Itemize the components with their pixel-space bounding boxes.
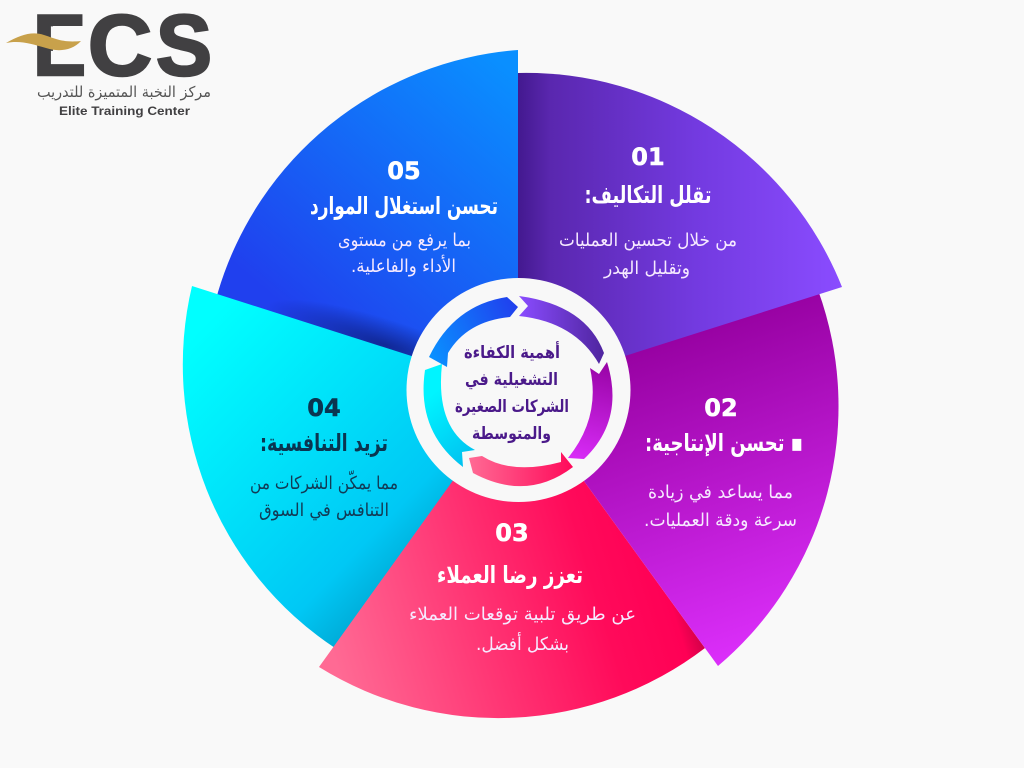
panel: 03 customer satisfaction [319,390,710,718]
logo letters ECS: S [156,0,212,94]
arrow 4 [424,364,475,467]
number 03: 03 [495,519,529,547]
center title: الشركات الصغيرة [455,397,569,417]
heading 02: ▪ تحسن الإنتاجية: [645,429,803,457]
text 04: مما يمكّن الشركات من [250,470,398,494]
text 03: بشكل أفضل. [476,632,569,655]
heading 04: تزيد التنافسية: [260,429,388,457]
text 05: بما يرفع من مستوى [338,230,471,251]
number 01: 01 [631,143,665,171]
text 03: عن طريق تلبية توقعات العملاء [409,604,636,625]
panel: 01 costs [518,73,842,390]
center title [455,341,569,444]
text 01: وتقليل الهدر [603,258,690,279]
number 02: 02 [704,394,738,422]
logo Arabic name: مركز النخبة المتميزة للتدريب [37,83,211,101]
text 05 [338,230,471,277]
center title: أهمية الكفاءة [464,341,560,363]
center circle [406,278,630,502]
center title: التشغيلية في [465,370,558,390]
number 04: 04 [307,394,341,422]
text 01: من خلال تحسين العمليات [559,230,737,251]
text 01 [559,230,737,279]
logo letters ECS: E [33,0,86,94]
panel: 05 resources [216,50,518,408]
logo gold swoosh [6,33,81,50]
panel: 02 productivity [518,290,839,666]
arrow 2 [568,362,612,459]
heading 01: تقلل التكاليف: [584,181,712,209]
center title: والمتوسطة [472,424,551,444]
arrow 5 [429,297,518,367]
panel: 04 competitiveness [183,286,518,648]
logo letters ECS [33,0,212,94]
arrow 1 [519,296,604,364]
text 02 [644,482,797,531]
logo letters ECS: C [88,0,152,94]
text 02: مما يساعد في زيادة [648,482,793,503]
logo English name: Elite Training Center [59,106,191,118]
text 05: الأداء والفاعلية. [351,255,456,277]
number 05: 05 [387,157,421,185]
text 03 [409,604,636,655]
logo E middle gap [53,26,86,61]
heading 03: تعزز رضا العملاء [437,561,583,589]
logo: Elite Training Center [6,0,212,118]
text 04: التنافس في السوق [259,500,389,521]
text 04 [250,470,398,521]
arrow 3 [469,452,573,486]
text 02: سرعة ودقة العمليات. [644,510,797,531]
heading 05: تحسن استغلال الموارد [310,192,498,220]
